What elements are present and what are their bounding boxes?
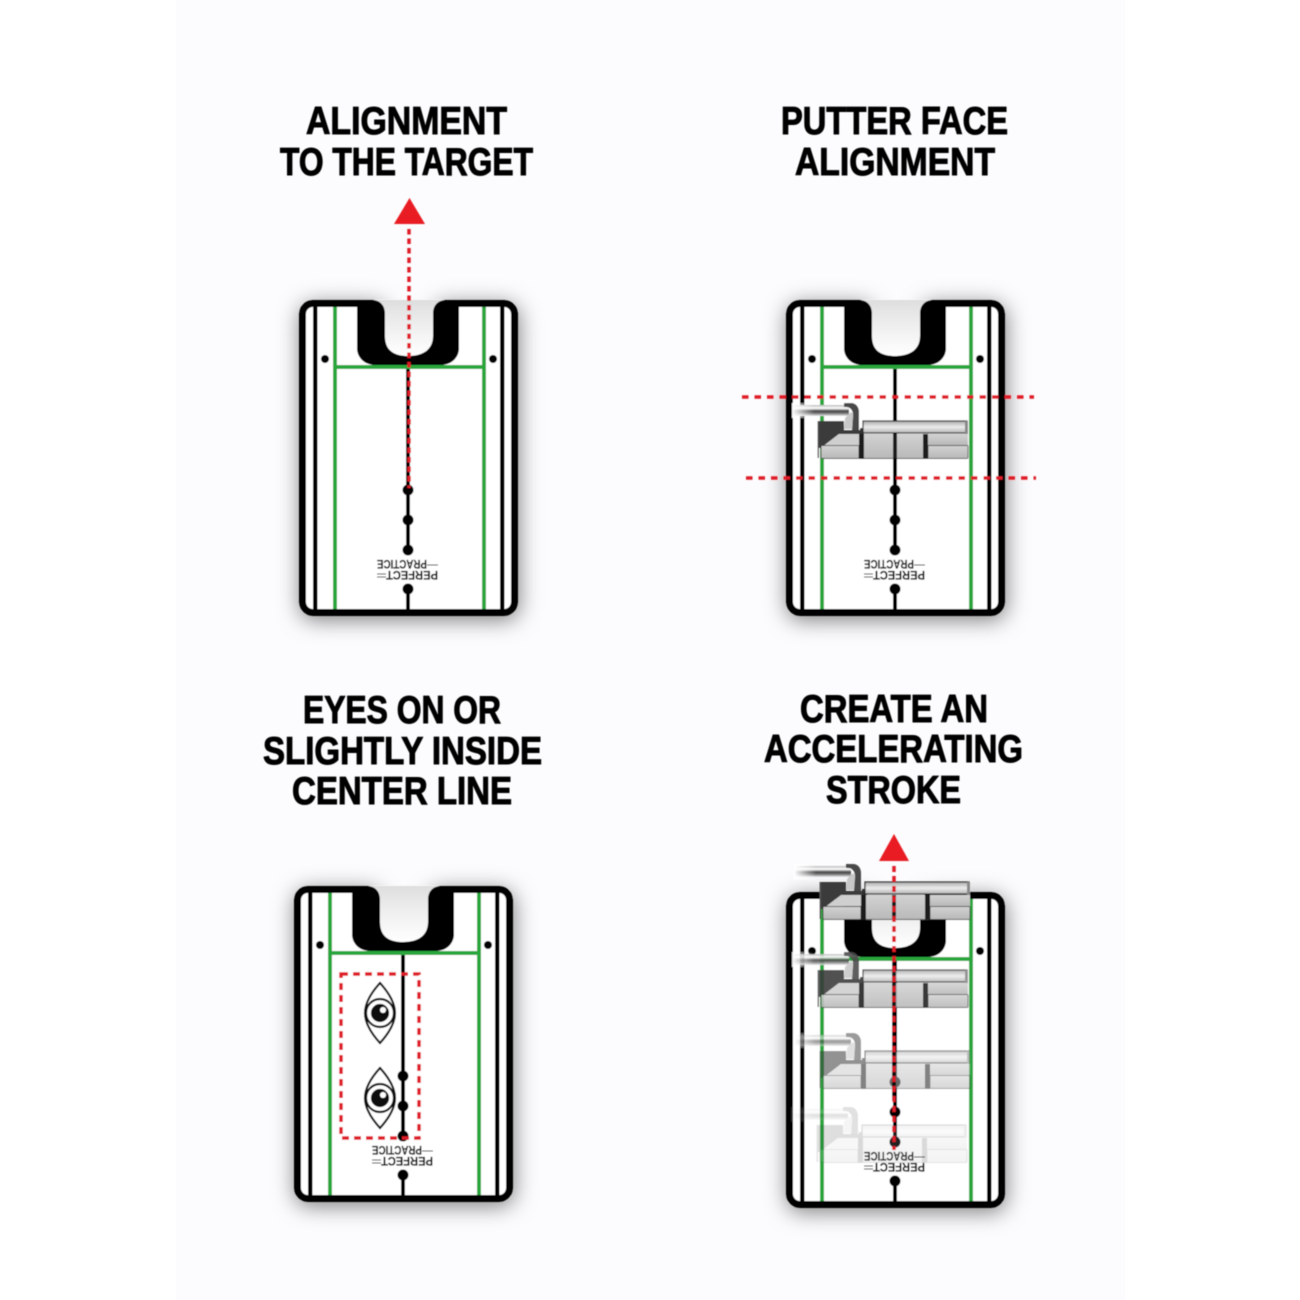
icon: putter head — [792, 403, 968, 459]
logo: perfect practice: PRACTICE — [864, 1149, 914, 1163]
icon: putter position 3 — [794, 1033, 970, 1089]
heading: putter face alignment: ALIGNMENT — [795, 141, 995, 184]
heading: create an accelerating stroke: STROKE — [826, 769, 961, 812]
panel: alignment mat — [299, 300, 518, 616]
logo: perfect practice: PERFECT — [872, 568, 925, 582]
guide line: top of putter — [742, 395, 1034, 399]
heading: eyes on or slightly inside center line: SLIGHTLY INSIDE — [263, 730, 542, 773]
logo: perfect practice: PERFECT — [385, 568, 438, 582]
icon: upper eye — [365, 983, 395, 1043]
heading: create an accelerating stroke — [764, 688, 1023, 812]
logo: perfect practice: PRACTICE — [372, 1143, 422, 1157]
center line over putter — [893, 433, 897, 459]
heading: alignment to the target: ALIGNMENT — [306, 100, 507, 143]
arrow: red target line — [394, 198, 425, 488]
panel: eye position mat — [294, 886, 513, 1202]
logo: perfect practice: PERFECT — [872, 1160, 925, 1174]
heading: create an accelerating stroke: CREATE AN — [800, 688, 988, 731]
logo: perfect practice — [377, 557, 438, 582]
heading: eyes on or slightly inside center line: CENTER LINE — [292, 770, 512, 813]
icon: putter position 1 — [794, 864, 970, 920]
logo: perfect practice: PRACTICE — [864, 557, 914, 571]
heading: eyes on or slightly inside center line — [263, 689, 542, 813]
heading: create an accelerating stroke: ACCELERATING — [764, 728, 1023, 771]
heading: eyes on or slightly inside center line: EYES ON OR — [303, 689, 501, 732]
center line over putters — [892, 895, 896, 1100]
heading: putter face alignment — [781, 100, 1008, 184]
artwork group — [263, 100, 1036, 1208]
logo: perfect practice — [864, 557, 925, 582]
logo: perfect practice: PRACTICE — [377, 557, 427, 571]
icon: putter position 4 — [791, 1107, 967, 1163]
panel: putter face mat — [786, 300, 1005, 616]
icon: lower eye — [365, 1068, 395, 1128]
background panel — [176, 0, 1125, 1300]
logo: perfect practice — [372, 1143, 433, 1168]
arrow: red stroke path — [879, 834, 909, 1150]
heading: putter face alignment: PUTTER FACE — [781, 100, 1008, 143]
logo: perfect practice: PERFECT — [380, 1154, 433, 1168]
panel: accelerating stroke mat — [786, 892, 1005, 1208]
heading: alignment to the target: TO THE TARGET — [280, 141, 533, 184]
logo: perfect practice — [864, 1149, 925, 1174]
heading: alignment to the target — [280, 100, 533, 184]
icon: putter position 2 — [792, 952, 968, 1008]
guide line: bottom of putter — [746, 476, 1036, 480]
dashed box: eye zone — [341, 974, 419, 1138]
